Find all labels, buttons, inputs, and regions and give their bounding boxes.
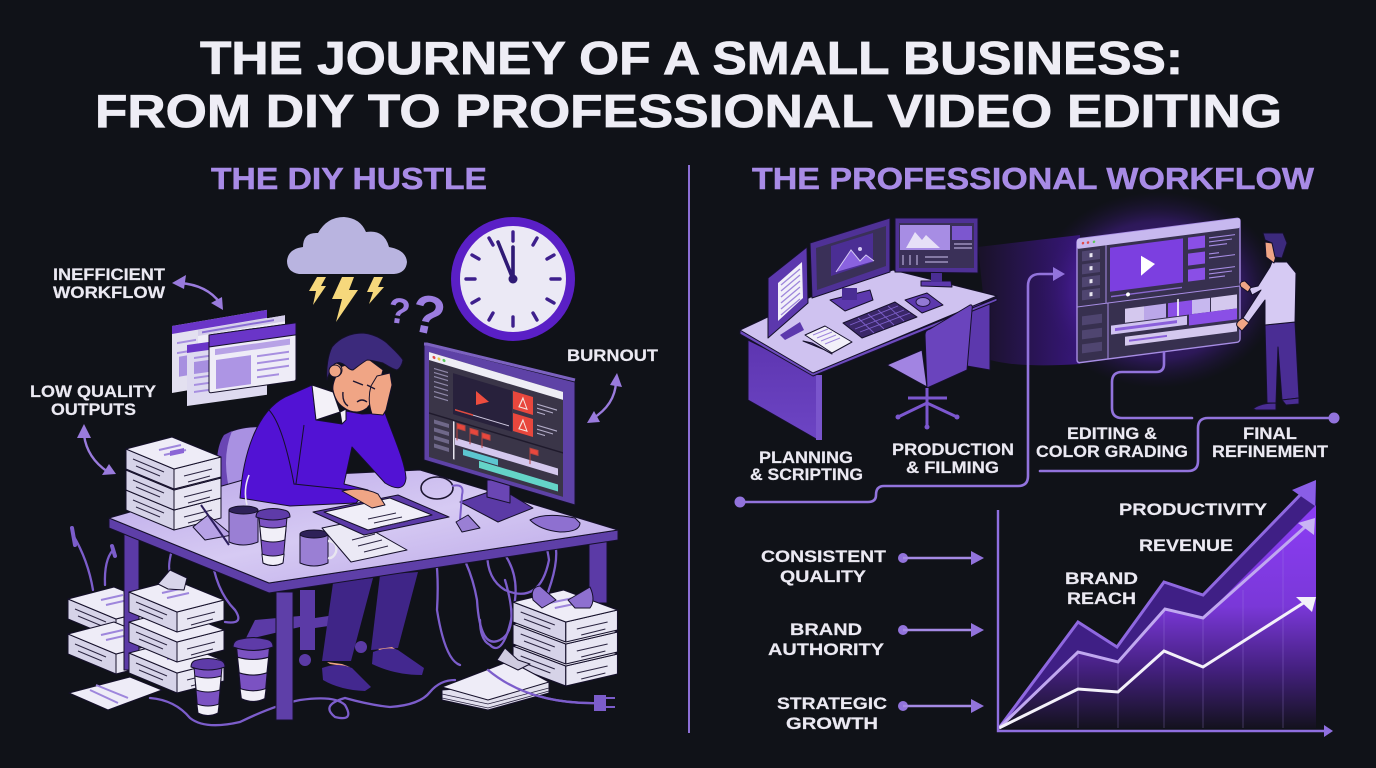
right monitor bbox=[895, 218, 978, 287]
label: low quality outputs: LOW QUALITY bbox=[30, 382, 157, 401]
chair behind the person bbox=[217, 427, 268, 500]
chart labels bbox=[1065, 500, 1268, 608]
cables under the desk bbox=[72, 495, 615, 725]
title bbox=[95, 32, 1282, 137]
title: THE JOURNEY OF A SMALL BUSINESS: bbox=[200, 32, 1183, 84]
mouse pad and mouse bbox=[905, 293, 943, 313]
glasses and tangled plug bbox=[421, 477, 580, 532]
coffee cups on the floor bbox=[191, 638, 273, 716]
growth chart bbox=[998, 480, 1333, 737]
facial features bbox=[343, 381, 375, 406]
arrow: burnout bbox=[587, 373, 622, 423]
stack: papers on the desk bbox=[126, 437, 221, 530]
productivity line bbox=[999, 480, 1316, 728]
label: production and filming: & FILMING bbox=[906, 458, 999, 477]
brand reach line bbox=[999, 597, 1316, 728]
chart labels: REACH bbox=[1067, 589, 1136, 608]
flat paper pile bbox=[442, 648, 600, 710]
coffee cup on desk bbox=[256, 508, 290, 566]
arrow: brand authority bbox=[898, 623, 984, 637]
hand on head bbox=[369, 373, 392, 415]
trousers bbox=[1265, 322, 1299, 403]
person's legs and shoes bbox=[322, 572, 424, 691]
label: consistent quality: CONSISTENT bbox=[761, 547, 887, 566]
label: planning and scripting: PLANNING bbox=[759, 448, 853, 467]
label: final refinement: REFINEMENT bbox=[1212, 442, 1329, 461]
arrow: low quality outputs bbox=[77, 424, 116, 475]
arrow: consistent quality bbox=[898, 551, 984, 565]
stack: left floor papers bbox=[129, 570, 224, 693]
office chair bbox=[887, 305, 972, 430]
desk bbox=[109, 470, 618, 720]
label: editing and color grading: EDITING & bbox=[1067, 424, 1157, 443]
light beam and glow bbox=[978, 192, 1280, 388]
label: consistent quality bbox=[761, 547, 887, 586]
productivity area bbox=[999, 480, 1316, 728]
shirt and arms bbox=[1243, 262, 1296, 325]
title: FROM DIY TO PROFESSIONAL VIDEO EDITING bbox=[95, 85, 1282, 137]
standing editor bbox=[1237, 233, 1299, 410]
head bbox=[1265, 242, 1276, 263]
heading: the DIY hustle: THE DIY HUSTLE bbox=[211, 161, 487, 196]
keyboard bbox=[843, 302, 917, 338]
label: inefficient workflow: WORKFLOW bbox=[53, 283, 166, 302]
writing hand bbox=[342, 489, 385, 508]
sheet of notes bbox=[322, 521, 407, 562]
icon: wall clock bbox=[451, 217, 575, 341]
loose paper on the floor bbox=[69, 677, 162, 710]
panel: DIY hustle illustration bbox=[30, 217, 659, 725]
label: brand authority: BRAND bbox=[790, 620, 862, 639]
panel: professional workflow illustration bbox=[734, 192, 1340, 737]
label: editing and color grading bbox=[1036, 424, 1188, 461]
chart labels: BRAND bbox=[1065, 569, 1138, 588]
left portrait monitor bbox=[768, 247, 808, 340]
label: consistent quality: QUALITY bbox=[780, 567, 867, 586]
label: strategic growth: STRATEGIC bbox=[777, 694, 887, 713]
label: strategic growth: GROWTH bbox=[786, 714, 878, 733]
person at the desk bbox=[240, 333, 406, 506]
label: final refinement bbox=[1212, 424, 1329, 461]
chart labels: REVENUE bbox=[1139, 536, 1233, 555]
icon: question marks bbox=[385, 282, 450, 348]
stack: right floor papers bbox=[513, 586, 618, 686]
label: inefficient workflow bbox=[53, 265, 166, 302]
label: production and filming: PRODUCTION bbox=[892, 440, 1014, 459]
icon: question marks: ? bbox=[385, 289, 413, 333]
arrow: inefficient workflow bbox=[172, 275, 223, 310]
label: production and filming bbox=[892, 440, 1014, 477]
items on the desk bbox=[193, 475, 580, 566]
hair bbox=[327, 333, 403, 380]
desk with monitors bbox=[740, 218, 997, 440]
label: brand authority: AUTHORITY bbox=[768, 640, 885, 659]
icon: overlapping browser windows bbox=[172, 310, 296, 406]
coffee mug bbox=[300, 530, 336, 566]
shirt collar bbox=[312, 385, 340, 420]
label: planning and scripting bbox=[750, 448, 863, 484]
under-desk chair base bbox=[245, 590, 367, 666]
label: planning and scripting: & SCRIPTING bbox=[750, 465, 863, 484]
arrow: strategic growth bbox=[898, 699, 984, 713]
shoes bbox=[1253, 398, 1299, 410]
icon: question marks: ? bbox=[406, 282, 450, 348]
label: low quality outputs: OUTPUTS bbox=[51, 400, 136, 419]
label: burnout: BURNOUT bbox=[567, 346, 659, 365]
list: outcomes with arrows bbox=[761, 547, 984, 733]
chart axes bbox=[998, 510, 1333, 737]
revenue area bbox=[999, 505, 1316, 728]
mug with steam bbox=[229, 475, 258, 545]
large editing screen bbox=[1077, 218, 1240, 363]
neck and face bbox=[333, 358, 383, 412]
revenue line bbox=[999, 518, 1315, 728]
chart labels: PRODUCTIVITY bbox=[1119, 500, 1268, 519]
heading: the professional workflow: THE PROFESSIONAL WORKFLOW bbox=[752, 161, 1315, 196]
label: final refinement: FINAL bbox=[1243, 424, 1297, 443]
centre monitor bbox=[810, 218, 890, 311]
label: strategic growth bbox=[777, 694, 887, 733]
hair bbox=[1263, 233, 1287, 258]
tablet with document bbox=[313, 495, 449, 535]
computer monitor with error timeline bbox=[424, 344, 575, 522]
hands bbox=[1237, 281, 1251, 331]
icon: storm cloud bbox=[287, 217, 407, 322]
label: inefficient workflow: INEFFICIENT bbox=[53, 265, 166, 284]
workflow connector line bbox=[734, 267, 1340, 508]
label: editing and color grading: COLOR GRADING bbox=[1036, 442, 1188, 461]
label: low quality outputs bbox=[30, 382, 157, 419]
paper on desk bbox=[803, 326, 852, 354]
label: brand authority bbox=[768, 620, 885, 659]
stack: back paper stack bbox=[68, 587, 163, 674]
